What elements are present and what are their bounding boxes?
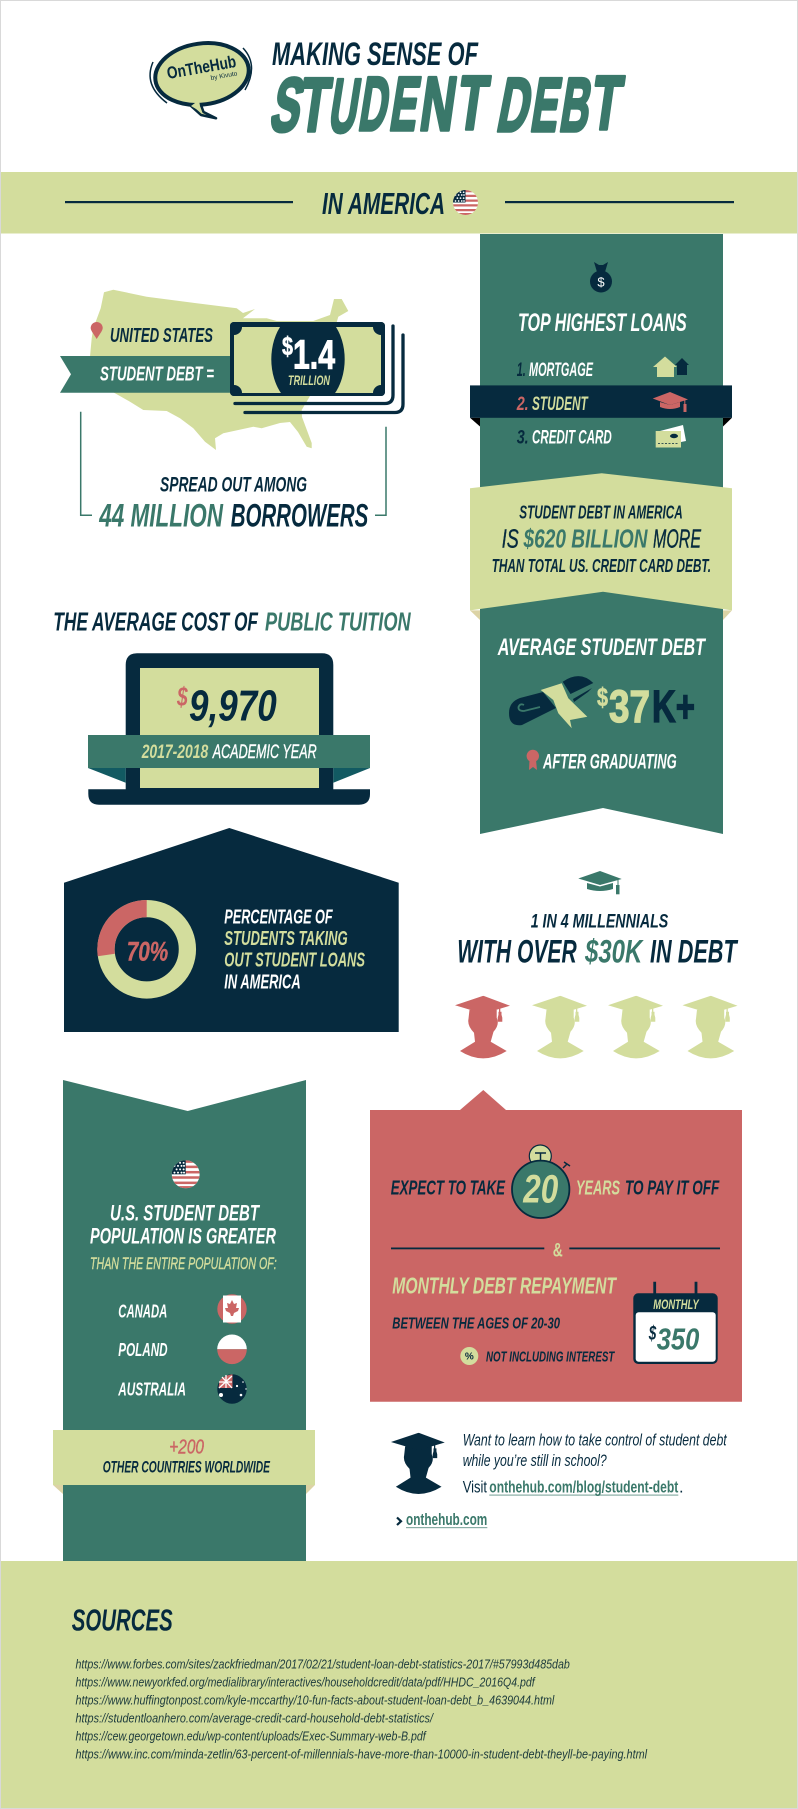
- banner: in America: IN AMERICA: [322, 186, 445, 221]
- title: E: [385, 62, 426, 147]
- icon: money bag: $: [597, 274, 605, 290]
- text: spread out among: SPREAD OUT AMONG: [160, 474, 307, 497]
- title: D: [354, 62, 396, 147]
- text: visit link: onthehub.com/blog/student-debt: [489, 1479, 679, 1497]
- text: visit link: [463, 1479, 684, 1497]
- stat: $37K+: [597, 681, 695, 732]
- panel: United States student debt: [60, 290, 403, 534]
- text: expect to take: EXPECT TO TAKE: [391, 1177, 505, 1199]
- icon: dollar bill 1.4 trillion: TRILLION: [288, 372, 331, 388]
- text: want to learn: [463, 1432, 728, 1470]
- icon: location pin: [91, 322, 103, 339]
- heading: 1 in 4 millennials: 1 IN 4 MILLENNIALS: [531, 910, 668, 932]
- icon: dollar bill 1.4 trillion: $: [282, 331, 293, 361]
- icon: US flag: [172, 1160, 200, 1189]
- icon: graduate pale 3: [682, 996, 738, 1058]
- row: student: [470, 385, 732, 426]
- label: United States: UNITED STATES: [110, 325, 213, 347]
- panel: top highest loans ribbon: [470, 234, 732, 834]
- list: source links: https://studentloanhero.com/average-credit-card-household-debt-statistics/: [76, 1710, 434, 1725]
- stat: $37K+: $: [597, 682, 608, 712]
- title: T: [295, 63, 336, 148]
- icon: stopwatch 20: 20: [523, 1168, 558, 1212]
- ribbon: academic year: ACADEMIC YEAR: [212, 741, 317, 763]
- band: $620 billion more: $620 BILLION: [523, 524, 648, 554]
- title: T: [453, 61, 494, 146]
- ribbon: academic year: [88, 735, 370, 768]
- heading: sources: SOURCES: [72, 1603, 173, 1638]
- ribbon: academic year: 2017-2018: [141, 741, 208, 763]
- row: credit card: CREDIT CARD: [532, 428, 612, 448]
- text: percentage of students taking out student loans: STUDENTS TAKING: [224, 928, 348, 950]
- link: onthehub.com: [397, 1511, 487, 1529]
- link: onthehub.com: onthehub.com: [406, 1511, 487, 1529]
- icon: percent badge: [460, 1347, 478, 1365]
- text: visit link: .: [679, 1479, 684, 1497]
- band: $620 billion more: [470, 473, 732, 620]
- list: source links: https://www.inc.com/minda-zetlin/63-percent-of-millennials-have-more-than-10000-in-student-debt-theyll-be-paying.html: [76, 1746, 648, 1761]
- heading: U.S. student debt population is greater: U.S. STUDENT DEBT: [110, 1201, 260, 1226]
- text: 44 million borrowers: [99, 498, 369, 534]
- heading: with over $30k in debt: IN DEBT: [650, 934, 738, 970]
- heading: average student debt: AVERAGE STUDENT DEBT: [497, 634, 707, 661]
- heading: U.S. student debt population is greater: [90, 1201, 276, 1248]
- row: mortgage: [517, 356, 689, 381]
- list: source links: https://cew.georgetown.edu/wp-content/uploads/Exec-Summary-web-B.pdf: [76, 1728, 427, 1743]
- panel: repayment: [370, 1090, 742, 1402]
- stat: $9,970: 9,970: [189, 682, 277, 731]
- row: Australia: AUSTRALIA: [118, 1379, 186, 1399]
- title: B: [555, 63, 598, 148]
- heading: average cost of public tuition: THE AVERAGE COST OF: [53, 607, 259, 637]
- banner: in America: [1, 172, 797, 234]
- heading: U.S. student debt population is greater: POPULATION IS GREATER: [90, 1223, 276, 1248]
- icon: dollar bill 1.4 trillion: [230, 322, 385, 396]
- row: Poland: POLAND: [118, 1340, 168, 1360]
- band: other countries worldwide: +200: [169, 1436, 204, 1458]
- title: N: [416, 62, 462, 147]
- ribbon folds: [88, 768, 370, 783]
- icon: diploma: [509, 676, 593, 728]
- icon: percent badge: %: [465, 1352, 474, 1362]
- row: Poland: [118, 1335, 247, 1364]
- list: source links: https://www.newyorkfed.org/medialibrary/interactives/householdcredit/data/pdf/HHDC_2016Q4.pdf: [76, 1675, 536, 1690]
- list: source links: [76, 1656, 648, 1761]
- row: student: 2.: [516, 394, 529, 415]
- ribbon: student debt equals: [60, 356, 232, 393]
- panel: sources: [1, 1561, 797, 1808]
- band: other countries worldwide: [53, 1430, 315, 1494]
- callout: learn more: [391, 1432, 728, 1529]
- bracket: [81, 412, 386, 515]
- ampersand: &: [553, 1241, 563, 1262]
- stacked bill lines: [235, 326, 403, 412]
- heading: with over $30k in debt: $30K: [584, 934, 644, 970]
- stat: $9,970: $: [176, 682, 188, 712]
- icon: stopwatch 20: [512, 1145, 570, 1218]
- title: T: [587, 61, 628, 146]
- stat: $37K+: 37: [609, 681, 650, 732]
- row: mortgage: MORTGAGE: [529, 360, 594, 381]
- title: MAKING SENSE OF: [272, 36, 479, 72]
- icon: graduate pale 2: [608, 996, 663, 1058]
- panel: 1 in 4 millennials: [455, 871, 738, 1058]
- text: not including interest: NOT INCLUDING INTEREST: [486, 1349, 615, 1366]
- title: S: [264, 63, 312, 148]
- list: source links: https://www.forbes.com/sites/zackfriedman/2017/02/21/student-loan-debt-statistics-2017/#57993d485dab: [76, 1656, 570, 1671]
- band: $620 billion more: IS: [502, 524, 519, 554]
- panel: U.S. student debt population: [53, 1080, 315, 1561]
- row: Canada: [118, 1294, 247, 1324]
- logo: OnTheHub speech bubble: [150, 37, 253, 118]
- text: between the ages: BETWEEN THE AGES OF 20-30: [392, 1315, 560, 1332]
- text: want to learn: while you’re still in school?: [463, 1452, 607, 1470]
- heading: top highest loans: TOP HIGHEST LOANS: [518, 309, 687, 337]
- logo: OnTheHub speech bubble: OnTheHub: [165, 52, 238, 83]
- text: monthly debt repayment: MONTHLY DEBT REPAYMENT: [392, 1272, 617, 1298]
- text: percentage of students taking out student loans: IN AMERICA: [224, 972, 301, 994]
- icon: calendar $350: 350: [657, 1321, 699, 1356]
- panel: laptop with tuition cost: [88, 653, 370, 805]
- text: years to pay it off: YEARS: [576, 1177, 620, 1199]
- icon: award ribbon: [527, 750, 539, 770]
- title: D: [492, 64, 539, 148]
- map of the United States: [90, 290, 348, 450]
- icon: calendar $350: MONTHLY: [653, 1296, 700, 1312]
- list: source links: https://www.huffingtonpost.com/kyle-mccarthy/10-fun-facts-about-student-loan-debt_b_4639044.html: [76, 1692, 555, 1707]
- title: E: [526, 63, 567, 148]
- text: visit link: Visit: [463, 1479, 487, 1497]
- text: years to pay it off: [576, 1177, 720, 1199]
- text: percentage of students taking out student loans: PERCENTAGE OF: [224, 906, 333, 928]
- chart: 70 percent donut: [106, 909, 187, 990]
- row: credit card: [517, 425, 686, 448]
- logo: OnTheHub speech bubble: by Kivuto: [210, 70, 238, 82]
- icon: money bag: [590, 262, 612, 292]
- chart: 70 percent donut: 70%: [127, 937, 168, 967]
- row: student: STUDENT: [532, 394, 589, 415]
- row: Australia: [118, 1374, 247, 1404]
- title: U: [324, 64, 366, 149]
- text: 44 million borrowers: 44 MILLION: [99, 498, 224, 534]
- text: than the entire population of: THAN THE ENTIRE POPULATION OF:: [90, 1254, 277, 1273]
- band: other countries worldwide: OTHER COUNTRIES WORLDWIDE: [103, 1457, 270, 1476]
- row: Canada: CANADA: [118, 1302, 167, 1322]
- heading: with over $30k in debt: WITH OVER: [457, 934, 577, 970]
- text: percentage of students taking out student loans: OUT STUDENT LOANS: [224, 950, 365, 972]
- stat: $37K+: K+: [652, 681, 695, 732]
- icon: graduate red: [455, 996, 510, 1058]
- icon: calendar $350: $: [648, 1323, 657, 1345]
- icon: calendar $350: [633, 1282, 718, 1364]
- band: $620 billion more: STUDENT DEBT IN AMERICA: [519, 503, 683, 523]
- icon: graduate pale 1: [532, 996, 587, 1058]
- row: credit card: 3.: [517, 428, 529, 448]
- text: percentage of students taking out student loans: [224, 906, 365, 994]
- text: 44 million borrowers: BORROWERS: [231, 498, 369, 534]
- icon: dollar bill 1.4 trillion: 1.4: [293, 332, 335, 378]
- text: after graduating: AFTER GRADUATING: [542, 750, 677, 774]
- text: years to pay it off: TO PAY IT OFF: [625, 1177, 720, 1199]
- icon: graduate navy: [391, 1433, 445, 1494]
- icon: graduation cap: [578, 871, 622, 894]
- title: [264, 36, 628, 149]
- heading: average cost of public tuition: PUBLIC TUITION: [265, 607, 412, 637]
- row: mortgage: 1.: [517, 360, 526, 381]
- panel: percentage taking student loans: [64, 828, 399, 1032]
- band: $620 billion more: MORE: [653, 524, 701, 554]
- heading: with over $30k in debt: [457, 934, 738, 970]
- ribbon: student debt equals: STUDENT DEBT =: [100, 364, 214, 386]
